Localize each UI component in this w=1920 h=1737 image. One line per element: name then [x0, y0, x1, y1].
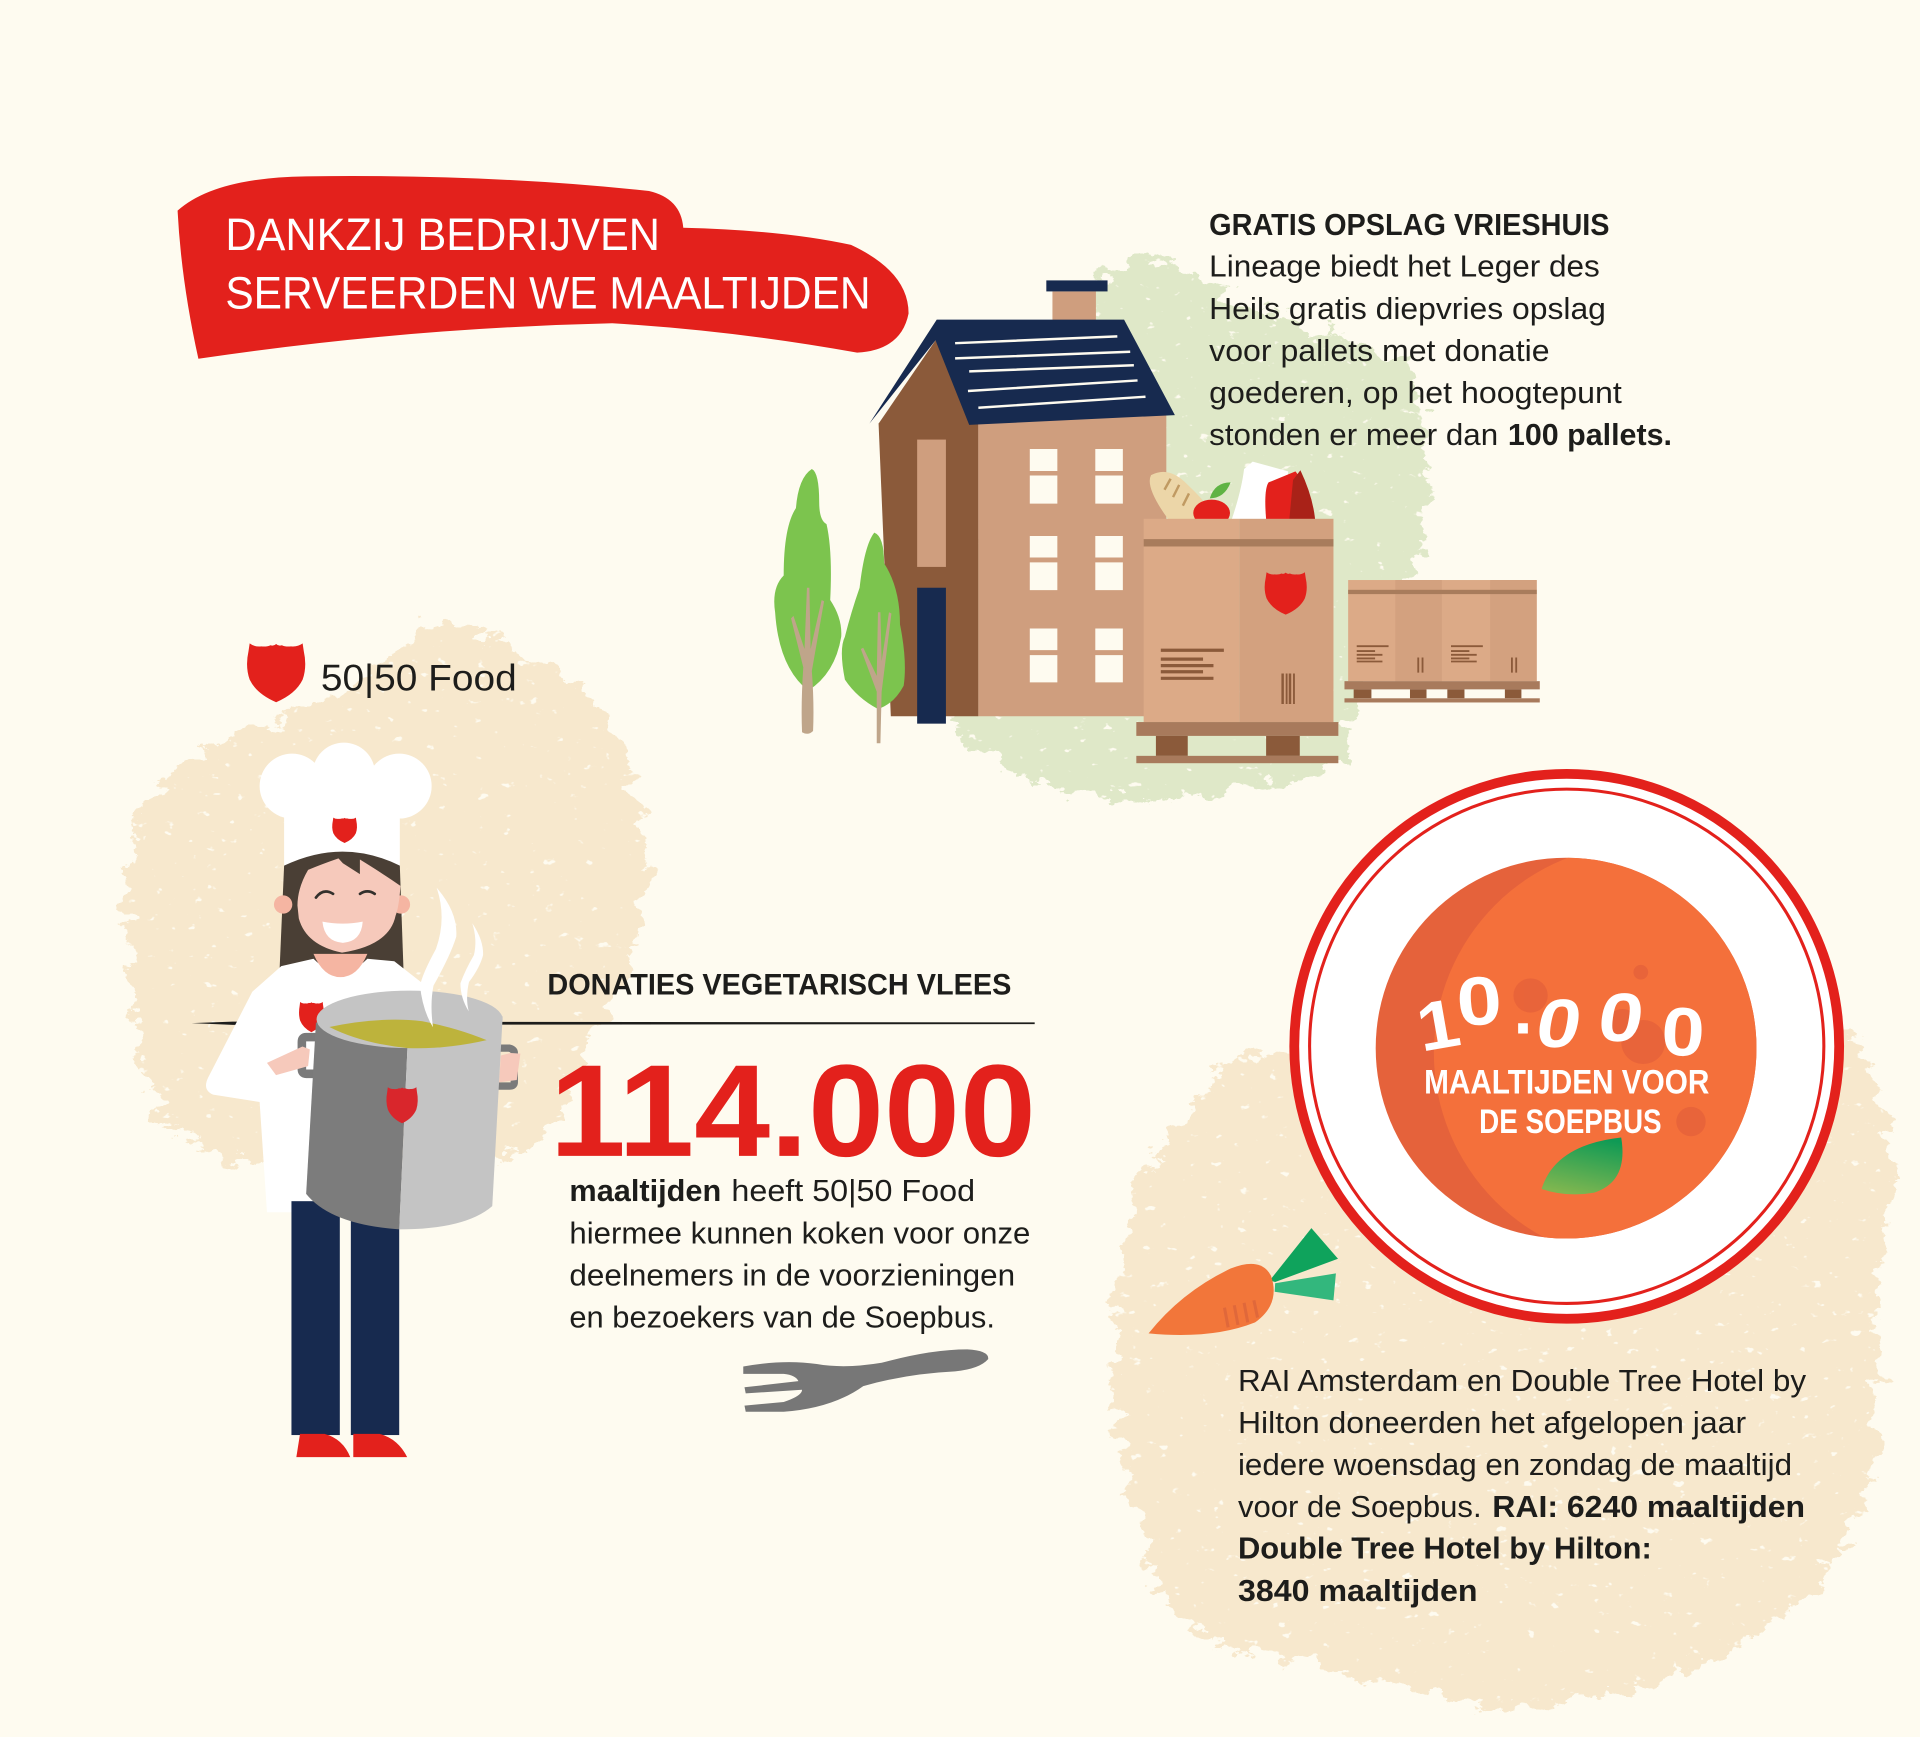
text block: RAI Amsterdam en Double Tree Hotel — [1238, 1364, 1807, 1608]
icon: food in box — [1150, 462, 1315, 527]
number 10.000: 0 — [1454, 961, 1504, 1041]
text block: RAI Amsterdam en Double Tree Hotel: iedere woensdag en zondag de maaltijd — [1238, 1448, 1792, 1482]
soup bubbles — [1513, 965, 1706, 1136]
illustration: chef with pot — [206, 743, 520, 1457]
title banner: SERVEERDEN WE MAALTIJDEN — [225, 268, 871, 319]
text block: gratis opslag vrieshuis: stonden er meer dan — [1209, 418, 1498, 452]
icon: carrot — [1149, 1228, 1338, 1335]
number 10.000: . — [1513, 971, 1532, 1048]
icon: trees — [774, 469, 905, 743]
steam — [420, 888, 456, 1027]
title banner: DANKZIJ BEDRIJVEN — [225, 209, 660, 260]
number 10.000: 0 — [1530, 985, 1588, 1062]
text block: gratis opslag vrieshuis: voor pallets met donatie — [1209, 334, 1550, 368]
background blob: tan behind plate — [1113, 1029, 1892, 1706]
text block: RAI Amsterdam en Double Tree Hotel: Hilton doneerden het afgelopen jaar — [1238, 1406, 1746, 1440]
text block: gratis opslag vrieshuis: 100 pallets. — [1508, 418, 1672, 452]
icon: warehouse building — [869, 280, 1175, 724]
number 10.000 — [1411, 961, 1707, 1071]
plate caption: MAALTIJDEN VOOR — [1424, 1063, 1710, 1101]
text block: RAI Amsterdam en Double Tree Hotel: RAI: 6240 maaltijden — [1492, 1490, 1805, 1524]
icon: large box on pallet — [1136, 519, 1338, 763]
text block: 114.000 maaltijden: deelnemers in de voorzieningen — [569, 1259, 1015, 1293]
hands — [267, 1047, 310, 1075]
plate caption: DE SOEPBUS — [1479, 1103, 1662, 1141]
background blob: tan behind chef — [125, 624, 647, 1163]
pot body — [306, 1022, 408, 1229]
text block: gratis opslag vrieshuis: Heils gratis diepvries opslag — [1209, 292, 1606, 326]
plate — [1294, 774, 1853, 1319]
text block: RAI Amsterdam en Double Tree Hotel: voor de Soepbus. — [1238, 1490, 1482, 1524]
coat — [206, 959, 453, 1212]
text block: gratis opslag vrieshuis: GRATIS OPSLAG VRIESHUIS — [1209, 208, 1610, 242]
soup — [1376, 858, 1757, 1239]
text block: 114.000 maaltijden: maaltijden — [569, 1174, 721, 1208]
icon: leaf — [1542, 1138, 1622, 1194]
text block: RAI Amsterdam en Double Tree Hotel: 3840 maaltijden — [1238, 1574, 1478, 1608]
text block: 114.000 maaltijden — [569, 1174, 1030, 1334]
icon: fork — [743, 1349, 988, 1412]
plate caption — [1424, 1063, 1710, 1141]
shoes — [296, 1434, 350, 1457]
big number 114.000: 114.000 — [550, 1037, 1036, 1184]
background blob: green behind warehouse — [949, 257, 1427, 800]
text block: 114.000 maaltijden: en bezoekers van de Soepbus. — [569, 1300, 995, 1334]
chef hat — [260, 743, 432, 866]
ears — [274, 895, 292, 914]
icon: red shield 50|50 food — [247, 643, 305, 702]
title banner — [178, 176, 909, 359]
pot handles — [302, 1037, 321, 1074]
text block: 114.000 maaltijden: heeft 50|50 Food — [731, 1174, 975, 1208]
text block: gratis opslag vrieshuis — [1209, 208, 1672, 452]
hair — [280, 852, 403, 970]
pants — [291, 1201, 340, 1435]
text block: RAI Amsterdam en Double Tree Hotel: Double Tree Hotel by Hilton: — [1238, 1532, 1652, 1566]
label: 50|50 food: 50|50 Food — [321, 658, 517, 699]
text block: 114.000 maaltijden: hiermee kunnen koken voor onze — [569, 1217, 1030, 1251]
text block: gratis opslag vrieshuis: goederen, op het hoogtepunt — [1209, 376, 1622, 410]
number 10.000: 0 — [1660, 992, 1707, 1071]
icon: small boxes on pallet — [1344, 580, 1540, 702]
face — [297, 858, 400, 953]
text block: gratis opslag vrieshuis: Lineage biedt het Leger des — [1209, 250, 1600, 284]
number 10.000: 0 — [1593, 979, 1649, 1055]
heading: donaties vegetarisch vlees: DONATIES VEGETARISCH VLEES — [547, 968, 1011, 1001]
text block: RAI Amsterdam en Double Tree Hotel: RAI Amsterdam en Double Tree Hotel by — [1238, 1364, 1807, 1398]
number 10.000: 1 — [1411, 985, 1466, 1067]
